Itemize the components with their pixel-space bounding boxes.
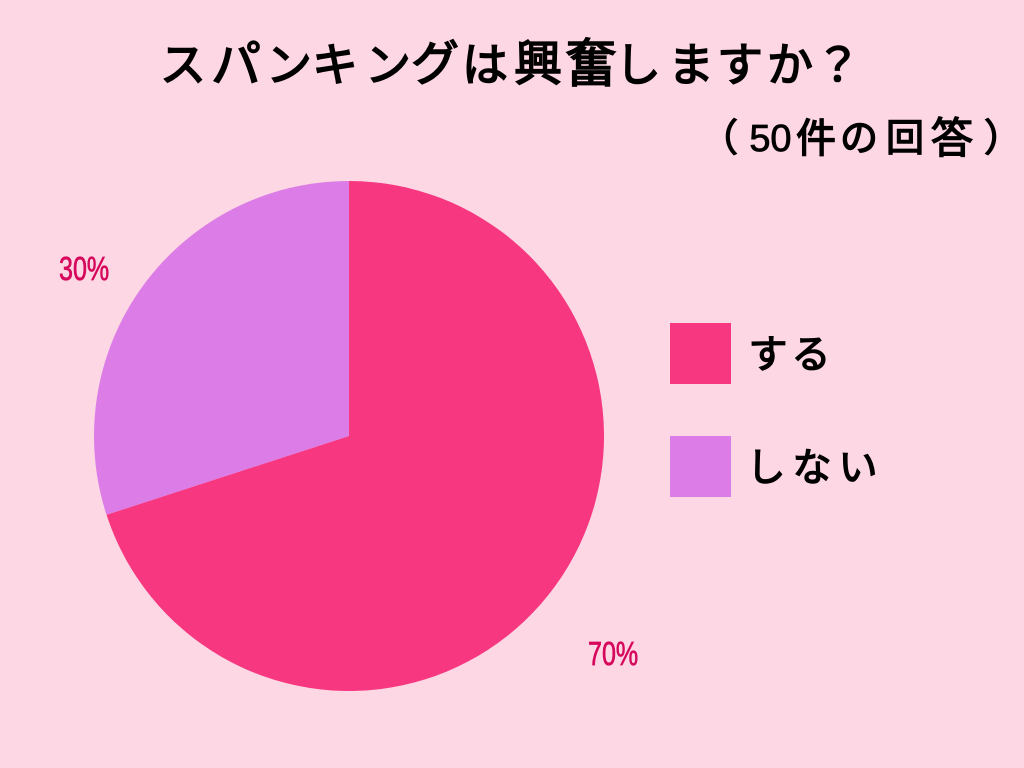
legend label: no: い	[838, 447, 878, 490]
title: し	[615, 39, 661, 91]
subtitle: number of responses: 件	[796, 117, 836, 161]
subtitle: number of responses	[700, 115, 1022, 162]
legend swatch: yes	[670, 323, 731, 384]
pie slice: yes 70%	[106, 181, 604, 691]
subtitle: number of responses: ）	[984, 118, 1022, 160]
pie slice: no 30%	[94, 181, 349, 515]
legend label: yes	[748, 334, 830, 377]
subtitle: number of responses: 0	[770, 118, 792, 160]
legend label: no: な	[792, 447, 832, 490]
legend label: yes: る	[791, 334, 830, 377]
subtitle: number of responses: （	[700, 118, 738, 160]
title: 奮	[565, 36, 617, 94]
label: 30%: 30%	[59, 250, 109, 287]
legend label: no	[746, 447, 878, 490]
title: ス	[160, 39, 206, 91]
title: キ	[312, 39, 358, 91]
title: ン	[266, 39, 312, 91]
legend label: yes: す	[748, 334, 788, 377]
subtitle: number of responses: の	[840, 118, 878, 160]
title: パ	[211, 37, 261, 93]
title: す	[717, 39, 763, 91]
legend label: no: し	[746, 447, 786, 490]
subtitle: number of responses: 答	[931, 115, 973, 162]
label: 70%: 70%	[588, 635, 638, 672]
title: グ	[411, 38, 459, 91]
title: か	[767, 39, 813, 91]
subtitle: number of responses: 5	[749, 118, 771, 160]
title: は	[462, 39, 508, 91]
title: ン	[365, 39, 411, 91]
title: ？	[815, 39, 861, 91]
title: 興	[514, 38, 562, 91]
legend swatch: no	[670, 436, 731, 497]
title	[160, 36, 861, 94]
subtitle: number of responses: 回	[886, 118, 924, 160]
title: ま	[668, 39, 714, 91]
